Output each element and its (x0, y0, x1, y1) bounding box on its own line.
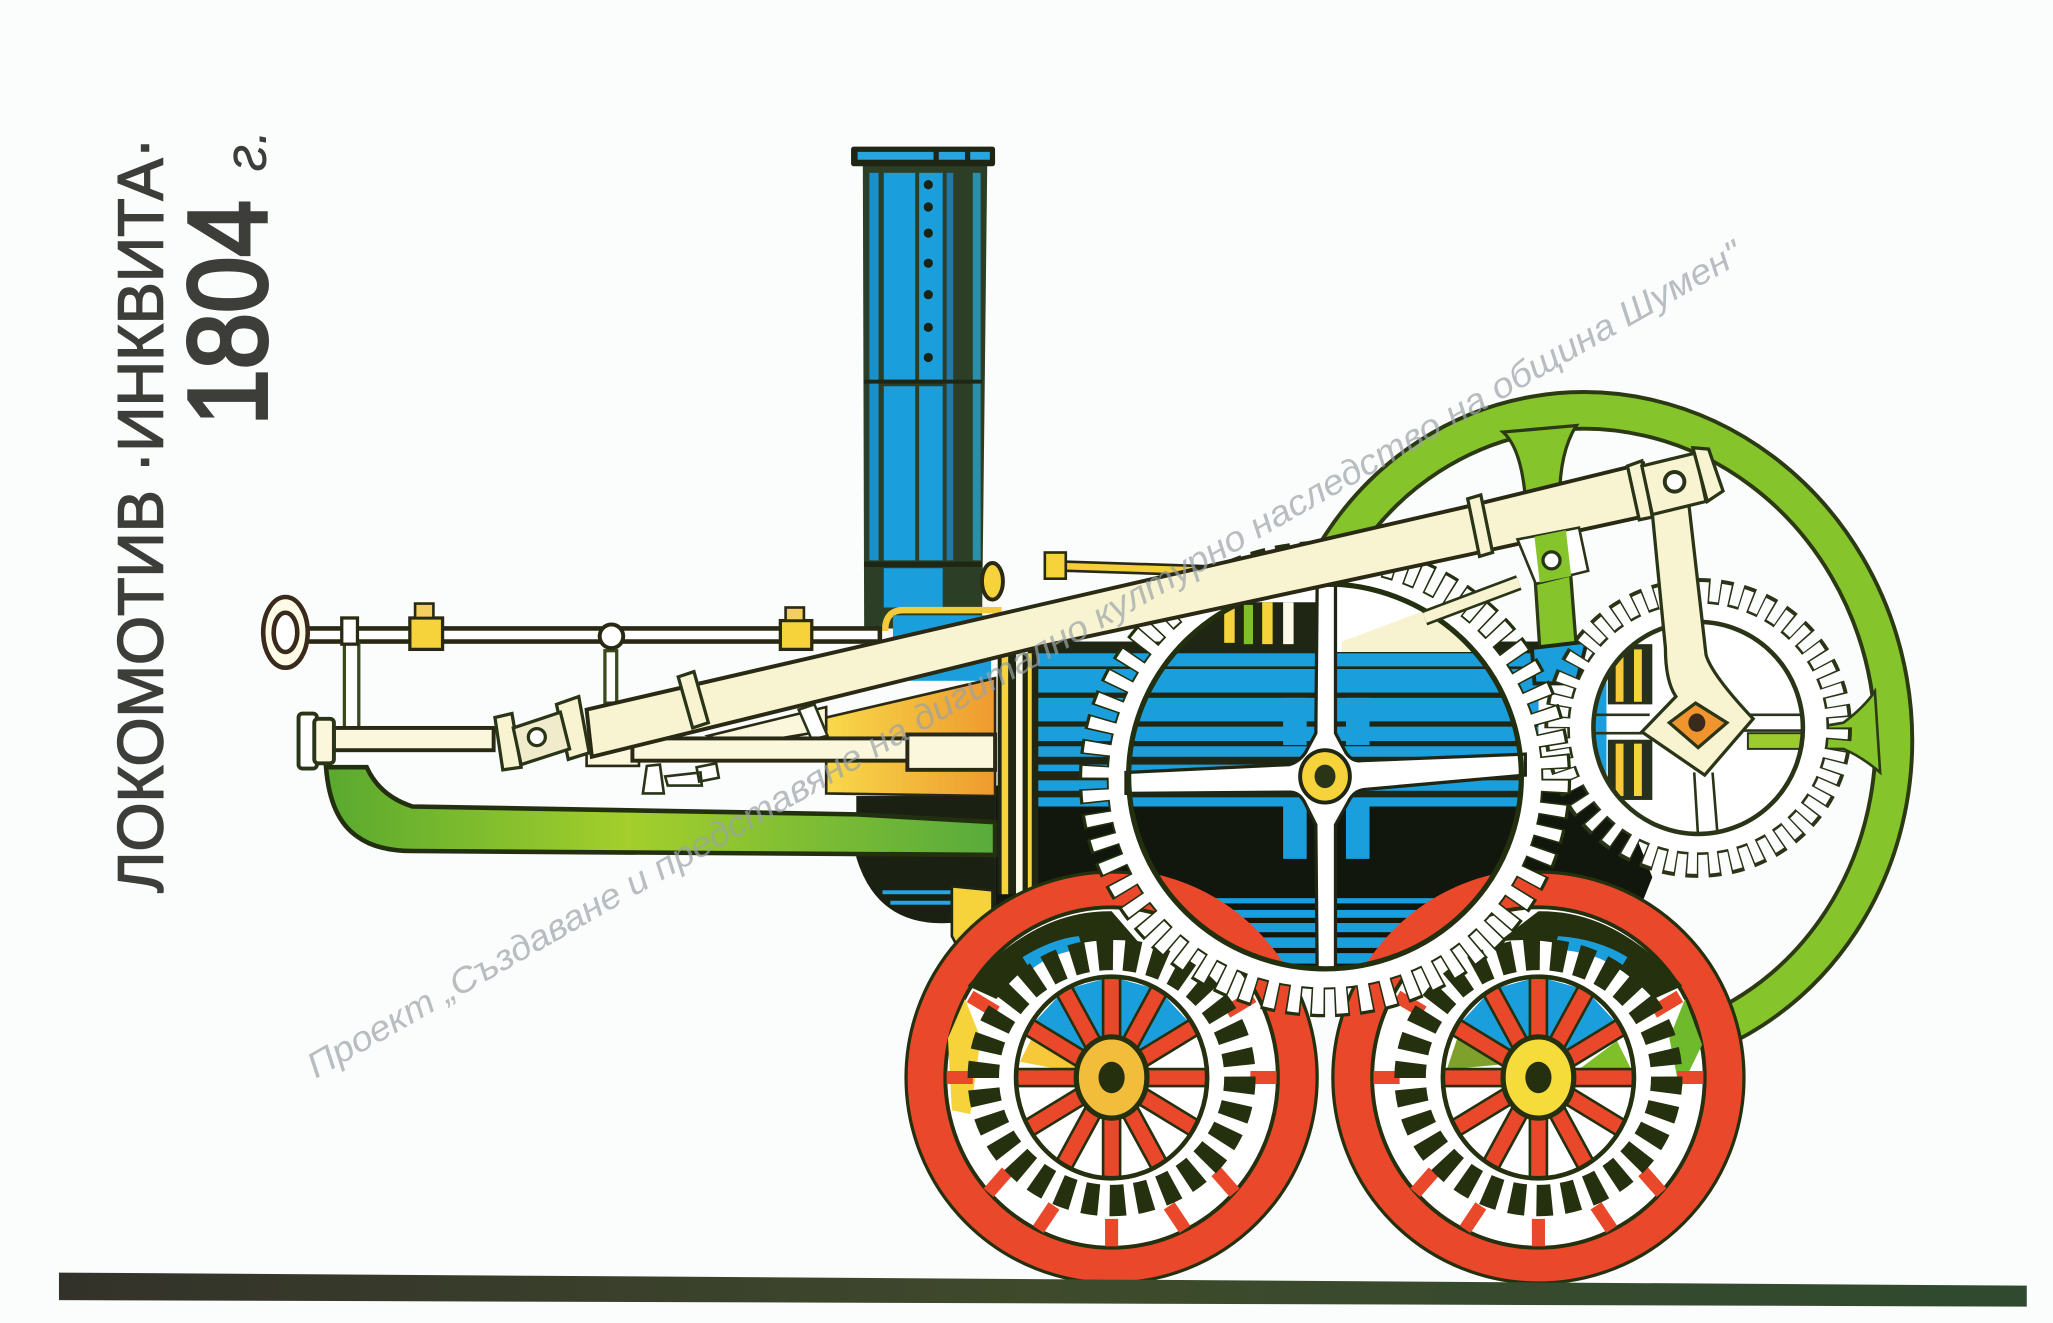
lower piston rod (587, 704, 995, 793)
valve rod: upper yellow rod (1045, 553, 1519, 618)
wheel: right red driving wheel (1333, 872, 1744, 1283)
heading: year 1804: 1804 (165, 200, 290, 426)
title: locomotive name: ЛОКОМОТИВ ·ИНКВИТА· (104, 137, 176, 893)
flywheel: large green wheel (1237, 362, 1945, 1104)
watermark: project credit: Проект „Създаване и представяне на дигитално културно наследство на община Шумен" (300, 233, 1750, 1086)
upper control rod with handle ring (263, 597, 880, 728)
text: year abbreviation: г. (211, 130, 279, 172)
connecting arm: cream arm with diamond crank (1642, 505, 1753, 775)
clevis: top end of beam (1627, 448, 1723, 520)
rail: ground line (59, 1273, 2027, 1307)
clevis: mid green spoke clamp (1517, 528, 1588, 584)
frame: vertical support post (952, 653, 1038, 956)
boiler: striped blue body (856, 642, 1652, 971)
beam: long cream connecting beam (495, 463, 1652, 770)
small gear: rear spur gear (1557, 590, 1840, 865)
piston rod: left rod and disc (299, 714, 494, 769)
wheel: left red driving wheel (906, 872, 1317, 1283)
big gear: central spur gear (1079, 541, 1572, 1018)
cylinder: orange block (826, 678, 995, 822)
chimney: blue smoke stack (851, 147, 1003, 681)
pipe: green curved pipe (326, 767, 995, 855)
